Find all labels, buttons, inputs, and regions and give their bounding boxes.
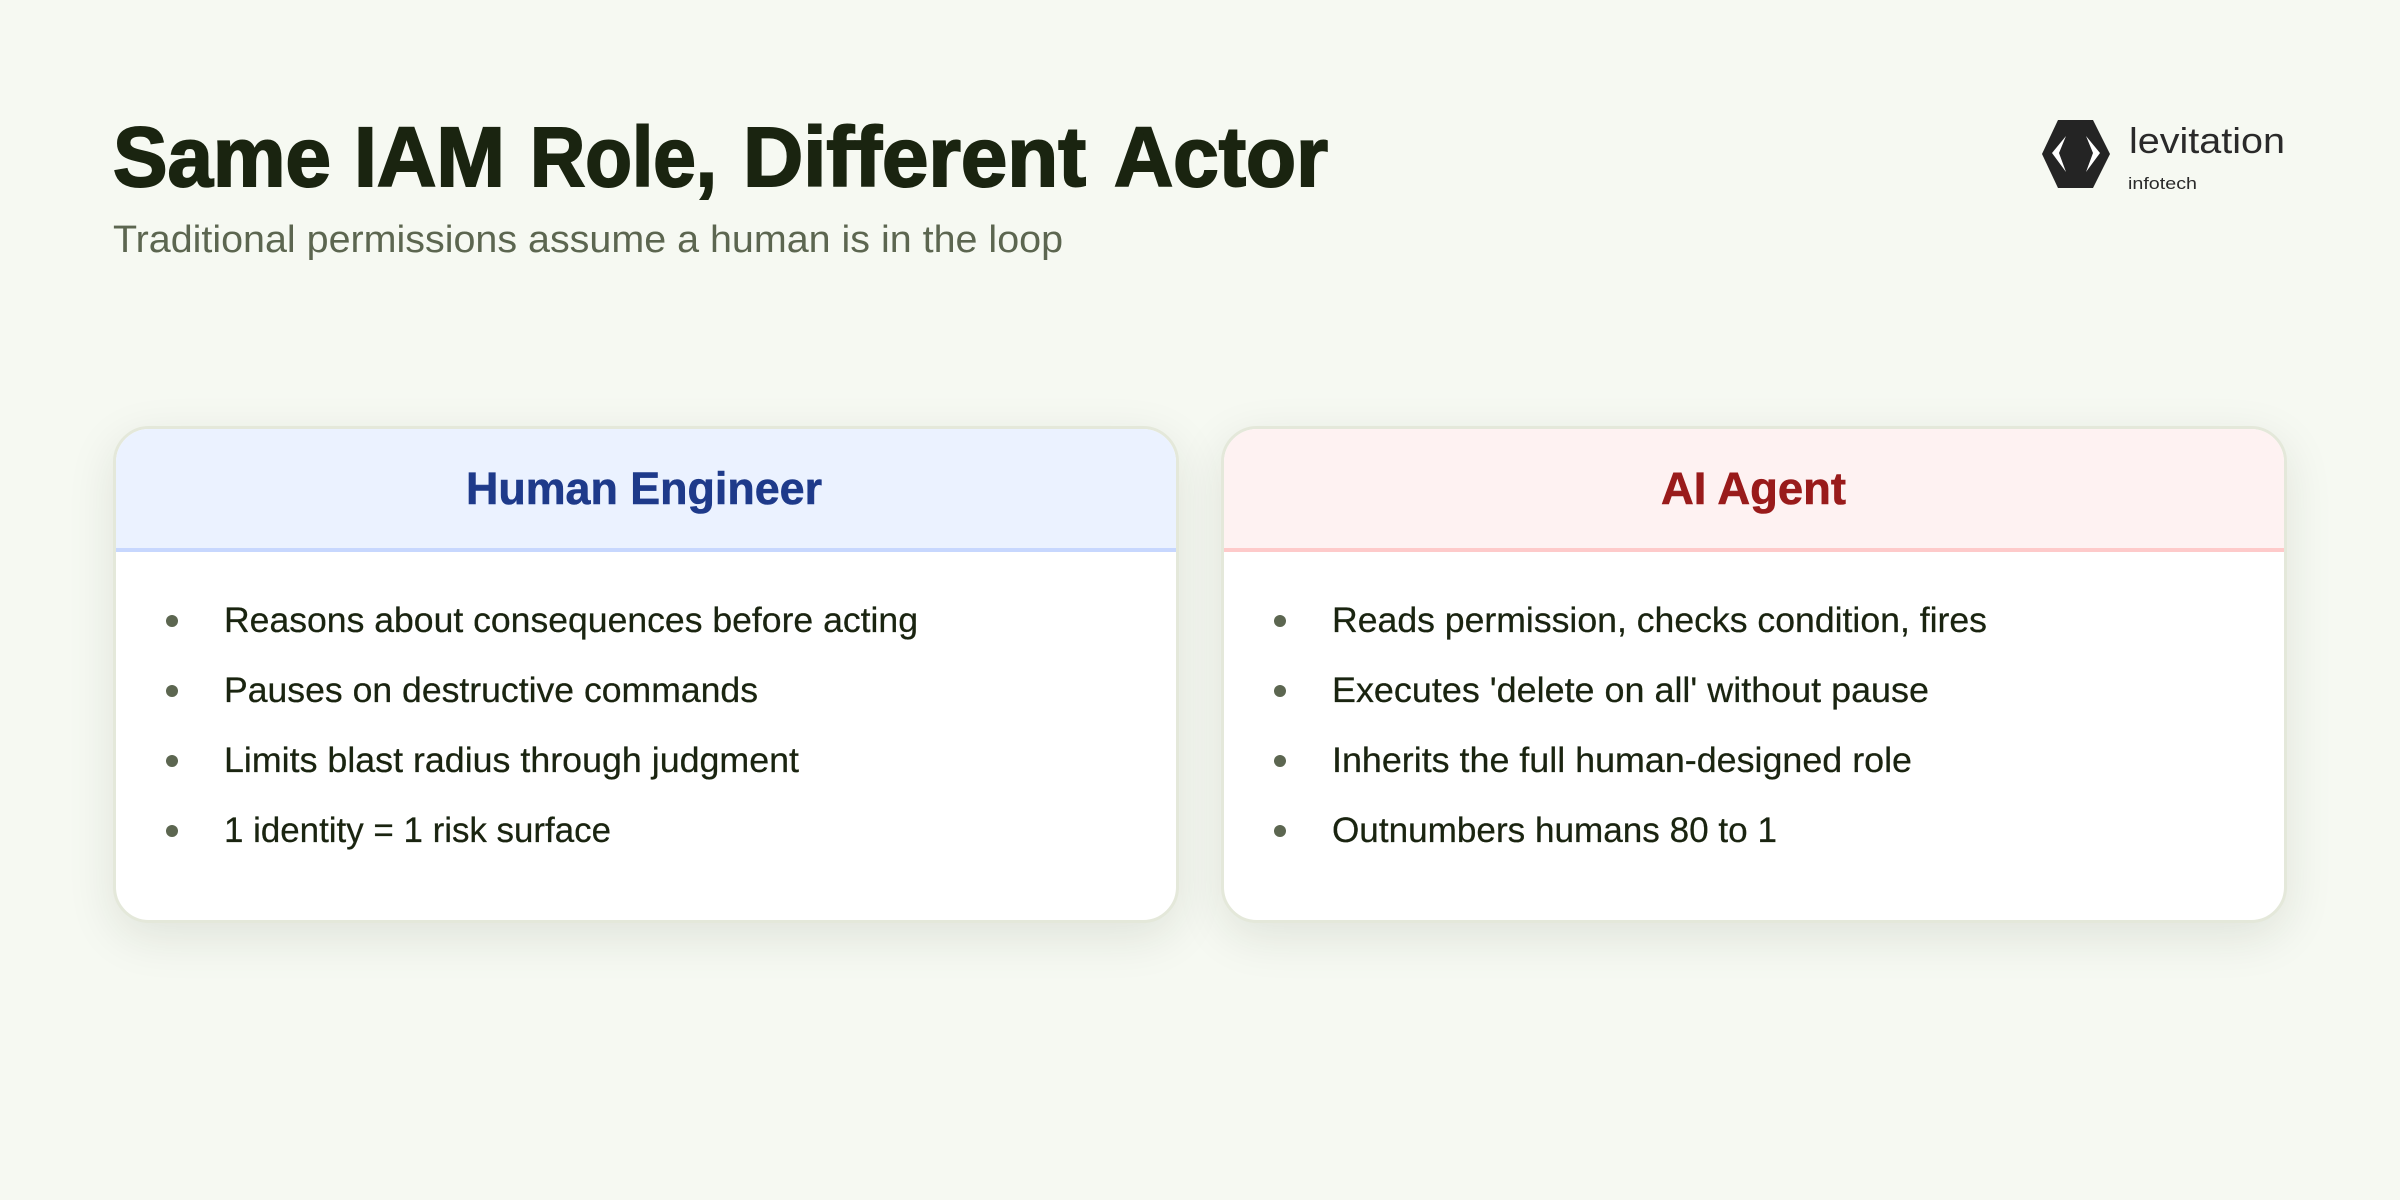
title: Role, — [530, 110, 717, 204]
human engineer header band — [116, 429, 1176, 552]
title: Same — [113, 110, 331, 204]
AI agent header band — [1224, 429, 2284, 552]
panel: human engineer card background — [113, 426, 1179, 923]
bullet 1: Reads permission, checks condition, fires — [1332, 601, 1987, 640]
title: Different — [743, 110, 1086, 204]
logo: levitation infotech — [2042, 120, 2285, 193]
logo wordmark: levitation — [2129, 120, 2285, 161]
bullet 1: Reasons about consequences before acting — [224, 601, 918, 640]
title: Actor — [1114, 110, 1328, 204]
bullet 4: 1 identity = 1 risk surface — [224, 811, 611, 850]
heading: AI agent: AI Agent — [1661, 463, 1846, 514]
panel: AI agent card background — [1221, 426, 2287, 923]
icon: hexagon with code chevrons — [2042, 120, 2110, 188]
title — [113, 110, 1328, 204]
subtitle: Traditional permissions assume a human is in the loop — [113, 219, 1063, 261]
bullet 3: Limits blast radius through judgment — [224, 741, 799, 780]
title: IAM — [354, 110, 505, 204]
logo tagline: infotech — [2128, 174, 2197, 193]
bullet 3: Inherits the full human-designed role — [1332, 741, 1912, 780]
bullet 2: Pauses on destructive commands — [224, 671, 758, 710]
bullet 4: Outnumbers humans 80 to 1 — [1332, 811, 1777, 850]
heading: human engineer: Human Engineer — [466, 463, 822, 514]
list: AI agent traits — [1274, 601, 1987, 850]
list: human engineer traits — [166, 601, 918, 850]
bullet 2: Executes 'delete on all' without pause — [1332, 671, 1929, 710]
